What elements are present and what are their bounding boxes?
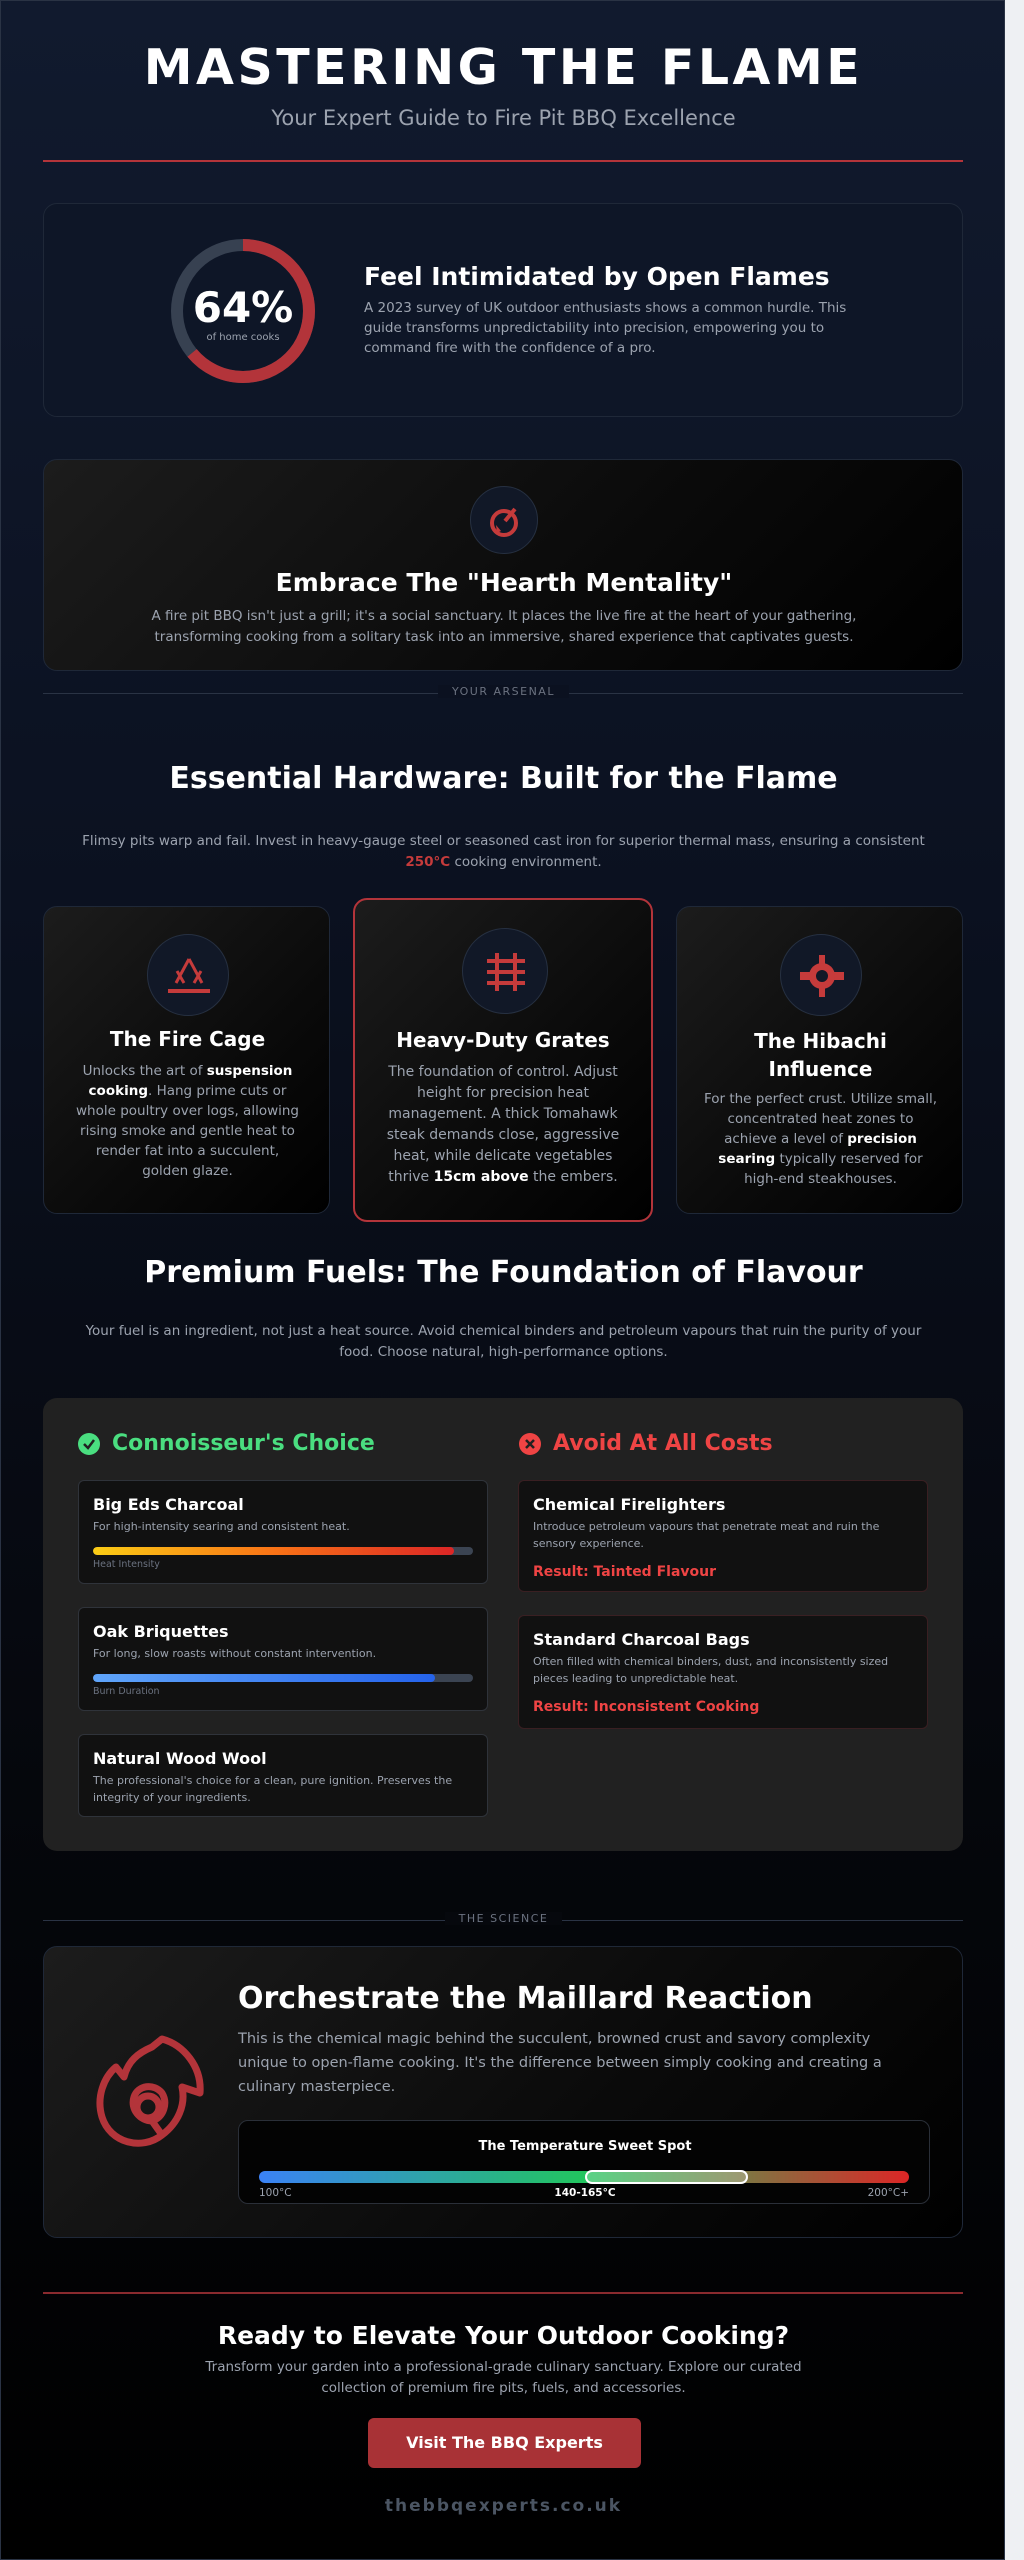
icon: hibachi: [780, 934, 862, 1016]
card: standard charcoal: Often filled with chemical binders, dust, and inconsistently sized pieces leading to unpredictable heat.: [533, 1655, 888, 1685]
divider: the science: [43, 1920, 963, 1921]
chart: temperature sweet spot: 200°C+: [868, 2187, 909, 2199]
card: chemical: [518, 1480, 928, 1592]
donut chart 64%: of home cooks: [206, 332, 280, 343]
text: YOUR ARSENAL: [452, 685, 555, 698]
donut chart 64%: 64%: [193, 283, 293, 332]
heading: Orchestrate the Maillard Reaction: [238, 1981, 813, 2016]
card: chemical: Introduce petroleum vapours that penetrate meat and ruin the sensory experience.: [533, 1520, 879, 1550]
card: wood wool: Natural Wood Wool: [93, 1749, 267, 1768]
chart: temperature sweet spot: [238, 2120, 930, 2204]
heading: premium fuels: Premium Fuels: The Foundation of Flavour: [144, 1255, 863, 1290]
icon: hearth: [470, 486, 538, 554]
chart: temperature sweet spot: 140-165°C: [554, 2187, 616, 2199]
card: hibachi: The Hibachi: [754, 1029, 887, 1053]
card: heavy-duty grates: [353, 898, 653, 1222]
card: big eds: [78, 1480, 488, 1584]
heading: cta: Ready to Elevate Your Outdoor Cooking?: [218, 2321, 789, 2350]
heading: Feel Intimidated by Open Flames: [364, 262, 830, 291]
text: Flimsy pits warp and fail. Invest in heavy-gauge steel or seasoned cast iron for superior thermal mass, ensuring a consistent 250°C cooking environment.: [82, 833, 925, 870]
card: oak: Oak Briquettes: [93, 1622, 229, 1641]
subtitle: Your Expert Guide to Fire Pit BBQ Excellence: [271, 106, 736, 130]
chart: temperature sweet spot: The Temperature Sweet Spot: [478, 2139, 692, 2154]
card: chemical: Chemical Firelighters: [533, 1495, 725, 1514]
card: hibachi: [676, 906, 963, 1214]
button: [368, 2418, 641, 2468]
footer url: thebbqexperts.co.uk: [385, 2496, 622, 2516]
panel: maillard: [43, 1946, 963, 2238]
card: hibachi: For the perfect crust. Utilize small, concentrated heat zones to achieve a level of precision searing typically reserved for high-end steakhouses.: [704, 1091, 937, 1187]
card: oak: Burn Duration: [93, 1686, 160, 1697]
card: fire cage: The Fire Cage: [110, 1027, 265, 1051]
card: fire cage: Unlocks the art of suspension cooking. Hang prime cuts or whole poultry over logs, allowing rising smoke and gentle heat to render fat into a succulent, golden glaze.: [76, 1063, 299, 1179]
panel: stat: [43, 203, 963, 417]
heading: essential hardware: Essential Hardware: Built for the Flame: [169, 761, 838, 796]
divider: your arsenal: [43, 693, 963, 694]
button: Visit The BBQ Experts: [406, 2433, 603, 2452]
card: oak: [78, 1607, 488, 1711]
card: heavy-duty grates: Heavy-Duty Grates: [396, 1028, 610, 1052]
icon: grate: [462, 928, 548, 1014]
card: hibachi: Influence: [769, 1057, 872, 1081]
card: heavy-duty grates: The foundation of control. Adjust height for precision heat management. A thick Tomahawk steak demands close, aggressive heat, while delicate vegetables thrive 15cm above the embers.: [387, 1064, 619, 1185]
text: This is the chemical magic behind the succulent, browned crust and savory complexity unique to open-flame cooking. It's the difference between simply cooking and creating a culinary masterpiece.: [238, 2031, 882, 2095]
donut chart 64%: [171, 239, 315, 383]
card: standard charcoal: [518, 1615, 928, 1729]
heading: avoid: Avoid At All Costs: [553, 1431, 773, 1456]
card: chemical: Result: Tainted Flavour: [533, 1564, 716, 1580]
card: big eds: Big Eds Charcoal: [93, 1495, 244, 1514]
card: fire cage: [43, 906, 330, 1214]
card: wood wool: The professional's choice for a clean, pure ignition. Preserves the integrity of your ingredients.: [93, 1774, 452, 1804]
title: MASTERING THE FLAME: [144, 39, 863, 96]
text: A 2023 survey of UK outdoor enthusiasts shows a common hurdle. This guide transforms unpredictability into precision, empowering you to command fire with the confidence of a pro.: [364, 300, 846, 356]
text: cta: Transform your garden into a professional-grade culinary sanctuary. Explore our curated collection of premium fire pits, fuels, and accessories.: [205, 2359, 802, 2396]
card: oak: For long, slow roasts without constant intervention.: [93, 1647, 376, 1660]
text: A fire pit BBQ isn't just a grill; it's a social sanctuary. It places the live fire at the heart of your gathering, transforming cooking from a solitary task into an immersive, shared experience that captivates guests.: [152, 608, 856, 645]
card: big eds: Heat Intensity: [93, 1559, 160, 1570]
card: wood wool: [78, 1734, 488, 1817]
text: THE SCIENCE: [459, 1912, 548, 1925]
icon: fire cage: [147, 934, 229, 1016]
card: standard charcoal: Result: Inconsistent Cooking: [533, 1699, 759, 1715]
card: big eds: For high-intensity searing and consistent heat.: [93, 1520, 350, 1533]
heading: Embrace The "Hearth Mentality": [276, 568, 732, 597]
panel: hearth mentality: [43, 459, 963, 671]
chart: temperature sweet spot: 100°C: [259, 2187, 292, 2199]
panel: fuels: [43, 1398, 963, 1851]
card: standard charcoal: Standard Charcoal Bags: [533, 1630, 750, 1649]
heading: connoisseur's choice: Connoisseur's Choice: [112, 1431, 375, 1456]
text: Your fuel is an ingredient, not just a heat source. Avoid chemical binders and petroleum vapours that ruin the purity of your food. Choose natural, high-performance options.: [86, 1323, 921, 1360]
icon: flame: [96, 2036, 204, 2147]
